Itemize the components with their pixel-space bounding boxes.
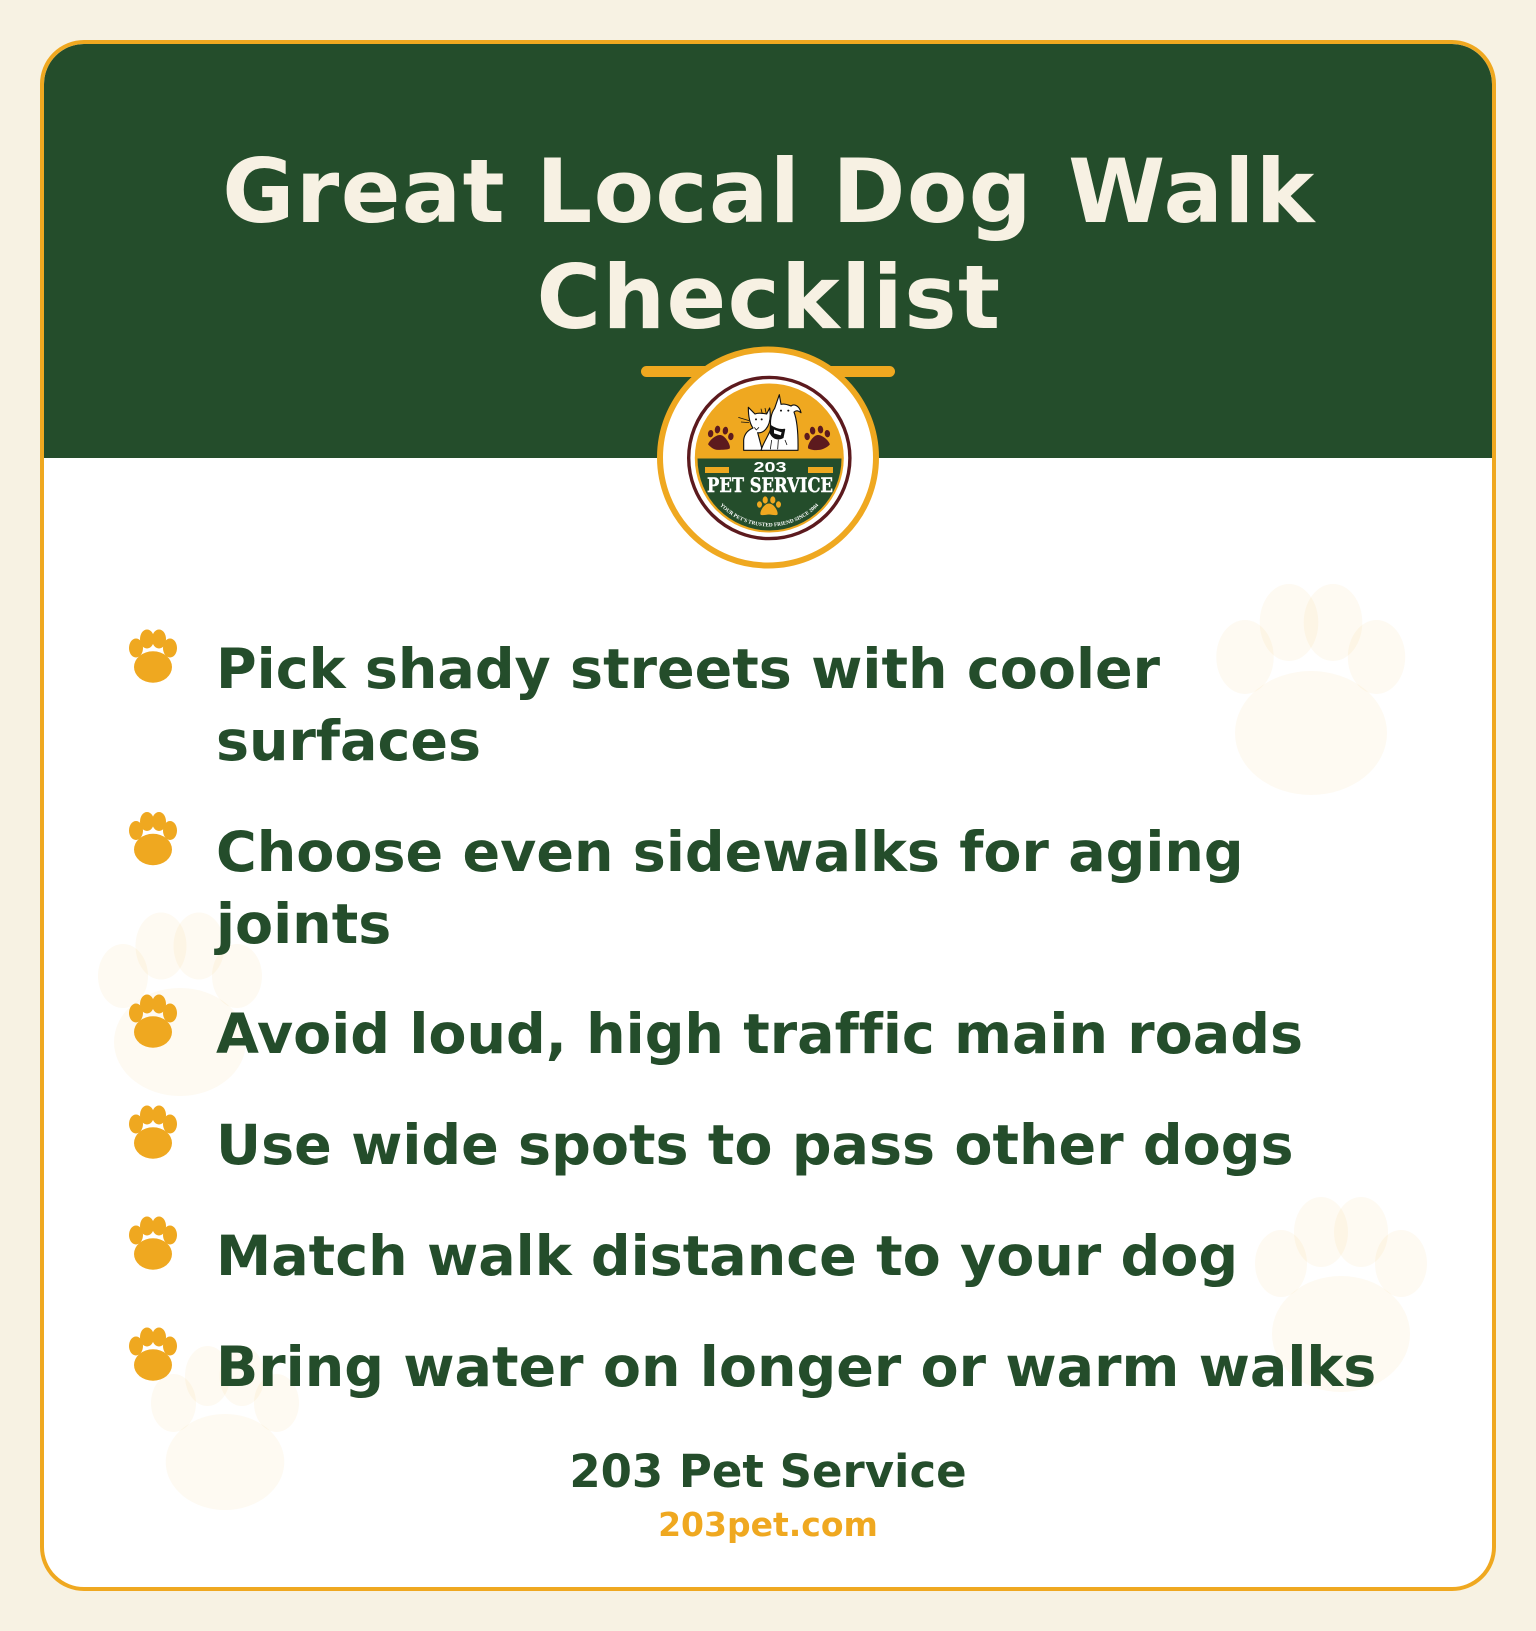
icon: cat and dog	[738, 395, 801, 450]
logo outer ring	[660, 350, 876, 566]
logo green lower section	[698, 458, 842, 530]
logo gold bars	[705, 467, 833, 473]
icon: paw bullet	[129, 812, 177, 865]
icon: paw bullet	[129, 630, 177, 683]
footer website: 203pet.com	[658, 1505, 878, 1544]
dog collar	[770, 425, 785, 439]
logo badge	[657, 346, 879, 568]
decorative paw: top right	[1216, 584, 1405, 795]
icon: paw bullet	[129, 994, 177, 1048]
checklist item 5	[129, 1216, 1238, 1289]
panel: header band	[44, 44, 1492, 458]
checklist item 2	[129, 812, 1244, 957]
decorative paw: lower right	[1255, 1197, 1427, 1392]
checklist item 4	[129, 1106, 1294, 1178]
logo tagline arc path	[710, 492, 829, 526]
item text: Pick shady streets with cooler	[216, 637, 1160, 702]
title underline bar	[641, 366, 895, 377]
logo text 203: 203	[754, 459, 786, 476]
faces and whiskers	[738, 408, 787, 449]
decorative paw: middle left	[98, 912, 262, 1096]
logo text pet service: PET SERVICE	[707, 473, 833, 497]
title: Great Local Dog Walk	[222, 140, 1317, 243]
footer brand name: 203 Pet Service	[569, 1445, 967, 1498]
collar tag	[774, 430, 782, 435]
title: Checklist	[537, 246, 1001, 349]
item text: Choose even sidewalks for aging	[216, 820, 1244, 885]
item text: surfaces	[216, 709, 481, 774]
icon: logo left maroon paw	[706, 424, 735, 452]
icon: paw bullet	[129, 1216, 177, 1270]
dog	[761, 395, 801, 450]
checklist item 1	[129, 630, 1161, 774]
logo tagline: YOUR PET'S TRUSTED FRIEND SINCE 2004	[720, 503, 818, 526]
item text: Avoid loud, high traffic main roads	[216, 1002, 1303, 1067]
logo gold disc	[695, 384, 844, 532]
icon: logo right maroon paw	[803, 424, 832, 452]
title	[222, 140, 1317, 349]
icon: paw bullet	[129, 1106, 177, 1159]
icon: paw bullet	[129, 1328, 177, 1381]
item text: joints	[214, 892, 391, 957]
decorative paw: bottom left	[151, 1346, 299, 1510]
item text: Use wide spots to pass other dogs	[216, 1113, 1294, 1178]
checklist	[129, 630, 1376, 1400]
item text: Match walk distance to your dog	[216, 1224, 1238, 1289]
checklist item 3	[129, 994, 1303, 1067]
item text: Bring water on longer or warm walks	[216, 1335, 1376, 1400]
cat	[744, 407, 770, 450]
icon: logo gold paw	[757, 496, 781, 515]
logo maroon ring	[689, 377, 850, 539]
checklist item 6	[129, 1328, 1376, 1400]
